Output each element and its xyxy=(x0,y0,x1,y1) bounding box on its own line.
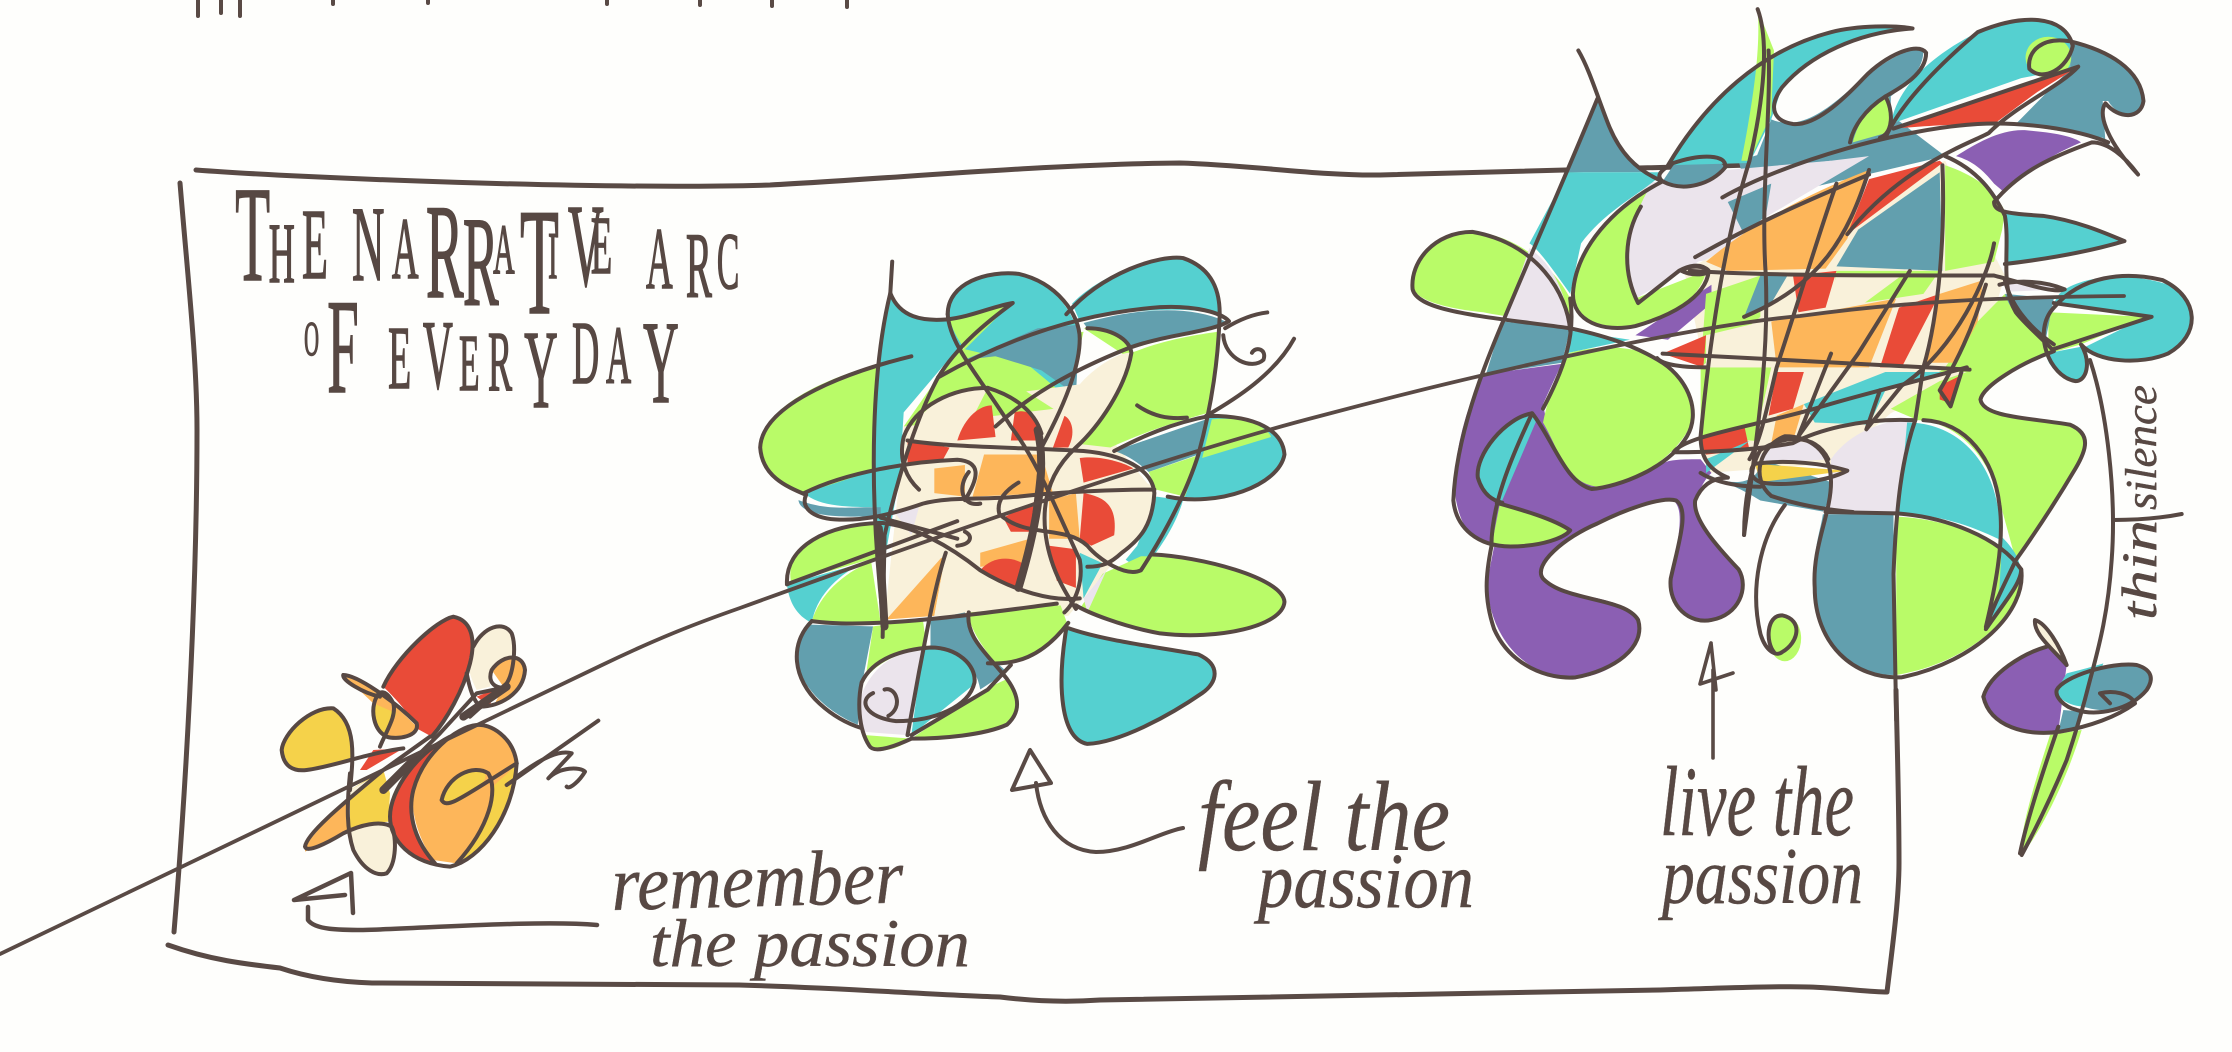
title: A xyxy=(646,210,673,308)
scribble: small fragment beside the thin silence xyxy=(1983,360,2182,855)
arrow: feel xyxy=(1012,750,1183,852)
title: A xyxy=(493,209,515,289)
title: H xyxy=(269,206,295,302)
title: R xyxy=(686,215,712,318)
label: remember the passion: remember xyxy=(610,832,905,927)
label: feel the passion: passion xyxy=(1253,837,1474,924)
title: D xyxy=(572,302,599,403)
title: N xyxy=(352,185,384,303)
frame around the arc xyxy=(168,161,1900,1001)
arrow: live xyxy=(1700,643,1733,758)
title xyxy=(235,159,741,432)
title: I xyxy=(548,219,557,294)
label: feel the passion: feel the xyxy=(1198,761,1450,872)
label: feel the passion xyxy=(1198,761,1474,924)
cropped text fragments at top edge xyxy=(198,0,847,16)
title: A xyxy=(606,309,631,401)
label: thin silence: silence xyxy=(2117,385,2166,510)
title: R xyxy=(463,193,499,334)
title: R xyxy=(488,314,512,410)
label: live the passion: passion xyxy=(1658,833,1863,921)
label: remember the passion xyxy=(610,832,970,981)
label: thin silence xyxy=(2111,385,2167,620)
title: O xyxy=(304,313,319,367)
title: V xyxy=(568,179,604,311)
title: T xyxy=(235,159,270,310)
long rising arc line xyxy=(0,296,2124,954)
title: E xyxy=(591,199,612,291)
title: V xyxy=(423,301,453,410)
title: R xyxy=(426,178,464,327)
title: F xyxy=(327,273,359,422)
arrow: remember xyxy=(294,873,597,930)
label: thin silence: thin xyxy=(2111,520,2167,620)
label: live the passion: live the xyxy=(1660,746,1854,857)
title: C xyxy=(717,218,739,306)
title: Y xyxy=(524,309,558,432)
title: T xyxy=(520,179,559,347)
label: live the passion xyxy=(1658,746,1863,921)
title: E xyxy=(388,307,411,408)
title: A xyxy=(392,200,419,298)
title: E xyxy=(459,320,480,408)
scribble: live the passion (large) xyxy=(1412,9,2192,720)
label: remember the passion: the passion xyxy=(650,905,970,981)
scribble: remember the passion (small) xyxy=(282,617,598,875)
title: E xyxy=(302,188,328,300)
scribble: feel the passion (medium) xyxy=(760,258,1294,750)
title: Y xyxy=(643,296,679,428)
